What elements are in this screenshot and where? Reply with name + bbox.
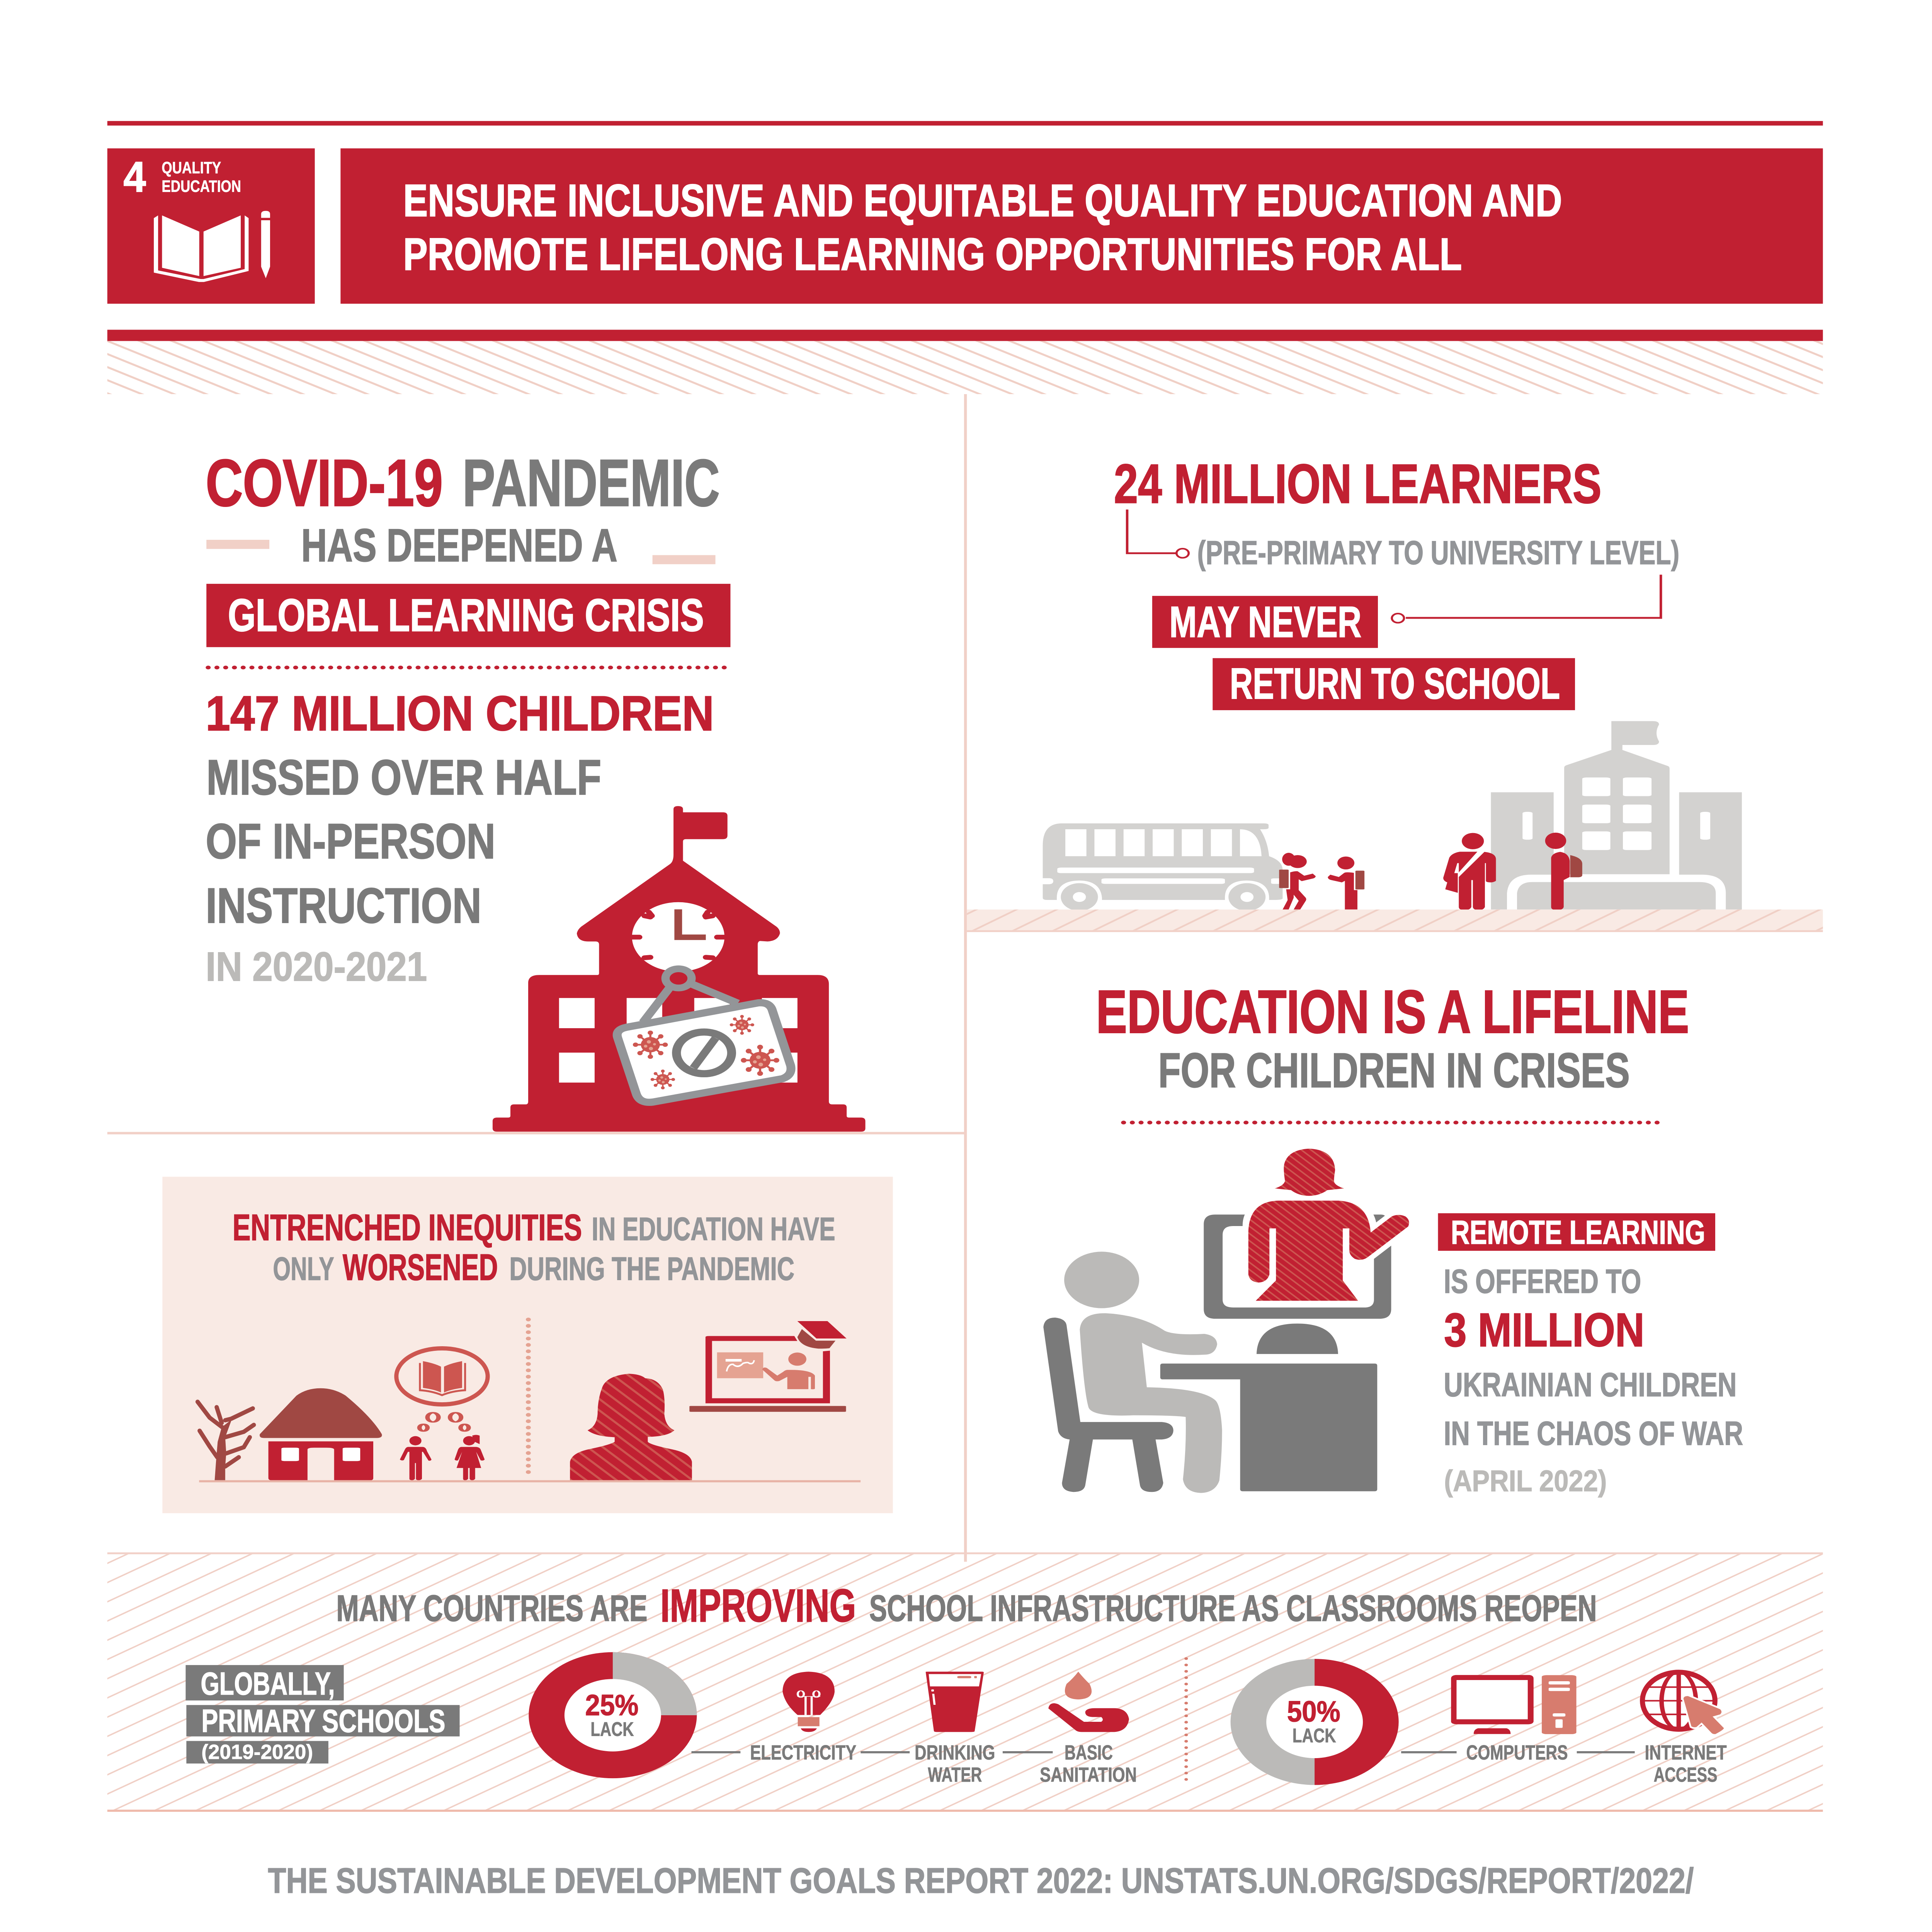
title text [403, 175, 1562, 280]
panel: covid crisis [206, 446, 866, 1132]
icon: thought bubble with book [396, 1349, 488, 1431]
icon: water glass [926, 1672, 984, 1732]
statistic text: (APRIL 2022) [1444, 1464, 1607, 1498]
statistic text: INSTRUCTION [206, 878, 481, 934]
statistic text: OF IN-PERSON [206, 814, 495, 869]
icon: seated student [1064, 1252, 1222, 1493]
icon: monitor [1204, 1214, 1391, 1354]
label: remote learning: REMOTE LEARNING [1451, 1214, 1705, 1251]
panel text: ONLY [273, 1251, 334, 1287]
top rule [107, 121, 1823, 126]
icon: desk [1160, 1364, 1377, 1491]
statistic text: UKRAINIAN CHILDREN [1444, 1366, 1737, 1403]
icon: striped woman [570, 1374, 692, 1480]
labels: school lacks (computers, internet) [1401, 1742, 1727, 1786]
panel: school infrastructure [107, 1552, 1823, 1812]
heading [1096, 978, 1689, 1098]
connector arrow [1127, 510, 1189, 558]
highlighted label [206, 584, 730, 647]
labels: school lacks (electricity, water, sanitation): ELECTRICITY [750, 1742, 856, 1764]
donut chart: 50% lack [1231, 1659, 1399, 1785]
illustration: home and remote learning [197, 1321, 861, 1482]
labels: school lacks (computers, internet): COMPUTERS [1466, 1742, 1568, 1764]
illustration: bus, school and people [1043, 721, 1742, 911]
icon: boy [400, 1436, 432, 1480]
donut chart: 25% lack [529, 1652, 697, 1778]
donut chart: 50% lack: LACK [1293, 1724, 1336, 1747]
illustration: remote learning [1043, 1149, 1409, 1493]
icon: globe with cursor [1643, 1672, 1724, 1734]
icon: light bulb [782, 1672, 835, 1732]
donut chart: 25% lack: LACK [590, 1718, 634, 1740]
labels: school lacks (computers, internet): ACCESS [1654, 1764, 1718, 1786]
title banner [340, 148, 1823, 304]
heading: 24 MILLION LEARNERS [1114, 452, 1602, 515]
label: globally primary schools: PRIMARY SCHOOLS [201, 1703, 446, 1739]
panel: education lifeline [1043, 978, 1743, 1498]
label: may never [1152, 596, 1378, 648]
label: globally primary schools [185, 1665, 460, 1764]
subheading [206, 519, 716, 571]
label: return to school: RETURN TO SCHOOL [1230, 659, 1560, 708]
statistic text [206, 686, 714, 990]
band heading [336, 1580, 1597, 1631]
panel text: DURING THE PANDEMIC [509, 1251, 794, 1287]
goal name [162, 158, 241, 196]
icon: striped teacher [1248, 1149, 1409, 1301]
header rule [107, 330, 1823, 341]
band heading: IMPROVING [660, 1580, 856, 1631]
icon: desktop computer [1451, 1675, 1577, 1734]
statistic text: IN 2020-2021 [206, 944, 427, 990]
icon: school building [1491, 721, 1742, 910]
icon: adult with folder [1443, 833, 1496, 910]
heading: covid-19 pandemic: COVID-19 [206, 446, 443, 520]
ground strip [967, 910, 1823, 932]
label: remote learning [1438, 1213, 1715, 1251]
statistic text: IS OFFERED TO [1444, 1262, 1641, 1300]
icon: school bus [1043, 823, 1282, 911]
labels: school lacks (electricity, water, sanitation): SANITATION [1040, 1764, 1137, 1786]
donut chart: 50% lack: 50% [1287, 1696, 1340, 1728]
panel: entrenched inequities [162, 1177, 893, 1513]
icon: laptop lesson [689, 1321, 847, 1412]
highlighted label: GLOBAL LEARNING CRISIS [228, 589, 704, 641]
statistic text: MISSED OVER HALF [206, 750, 601, 805]
labels: school lacks (electricity, water, sanitation) [691, 1742, 1137, 1786]
statistic text: 147 MILLION CHILDREN [206, 686, 714, 741]
subheading: HAS DEEPENED A [301, 519, 617, 571]
goal badge [107, 148, 315, 304]
band heading: MANY COUNTRIES ARE [336, 1588, 648, 1629]
label: globally primary schools: GLOBALLY, [201, 1666, 335, 1701]
icon: girl with backpack [1279, 853, 1316, 910]
statistic text: 3 MILLION [1444, 1304, 1645, 1357]
icon: book and pencil [154, 211, 270, 282]
labels: school lacks (electricity, water, sanitation): DRINKING [915, 1742, 995, 1764]
panel text: IN EDUCATION HAVE [592, 1211, 835, 1247]
panel text [233, 1207, 835, 1288]
label: may never: MAY NEVER [1169, 598, 1361, 646]
goal name: EDUCATION [162, 177, 241, 196]
labels: school lacks (electricity, water, sanitation): WATER [928, 1764, 982, 1786]
labels: school lacks (electricity, water, sanitation): BASIC [1065, 1742, 1113, 1764]
icon: bare tree [197, 1402, 254, 1480]
heading: covid-19 pandemic: PANDEMIC [463, 446, 720, 520]
icon: adult with backpack [1545, 833, 1582, 910]
donut chart: 25% lack: 25% [585, 1689, 638, 1722]
label: globally primary schools: (2019-2020) [201, 1741, 313, 1764]
panel text: ENTRENCHED INEQUITIES [233, 1207, 582, 1248]
panel text: WORSENED [343, 1247, 498, 1288]
statistic text [1444, 1262, 1743, 1498]
labels: school lacks (computers, internet): INTERNET [1645, 1742, 1727, 1764]
icon: hut [260, 1388, 382, 1480]
connector arrow [1392, 575, 1661, 623]
goal name: QUALITY [162, 158, 221, 177]
label: return to school [1213, 658, 1575, 710]
panel: 24 million learners [967, 452, 1823, 932]
icon: hand with water drop [1048, 1672, 1129, 1732]
icon: girl [454, 1435, 485, 1480]
icon: closed school [493, 806, 866, 1132]
goal number: 4 [123, 153, 146, 201]
icon: boy with backpack [1328, 857, 1364, 910]
icon: chair [1043, 1318, 1173, 1492]
